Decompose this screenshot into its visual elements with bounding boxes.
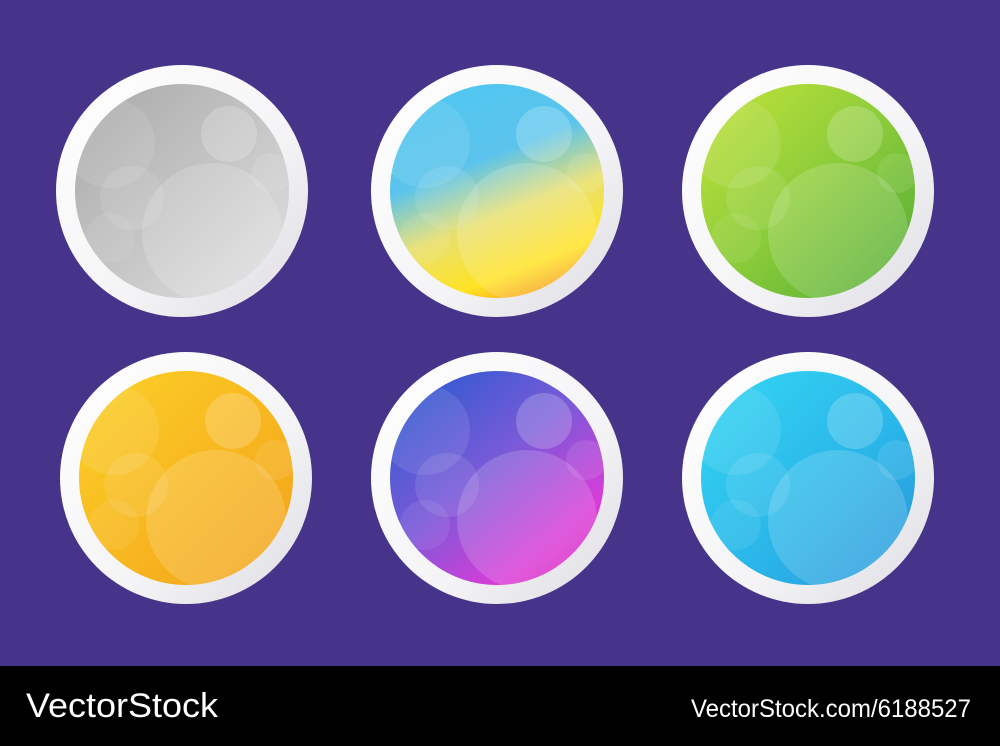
footer logo text: VectorStock	[26, 687, 219, 725]
footer id text: VectorStock.com/6188527	[691, 695, 971, 723]
badge: cyan	[682, 352, 934, 604]
footer bar	[0, 666, 1000, 746]
badge: orange	[60, 352, 312, 604]
badge: green	[682, 65, 934, 317]
badge: purple-magenta	[371, 352, 623, 604]
badge: blue-yellow	[371, 65, 623, 317]
badge: gray	[56, 65, 308, 317]
